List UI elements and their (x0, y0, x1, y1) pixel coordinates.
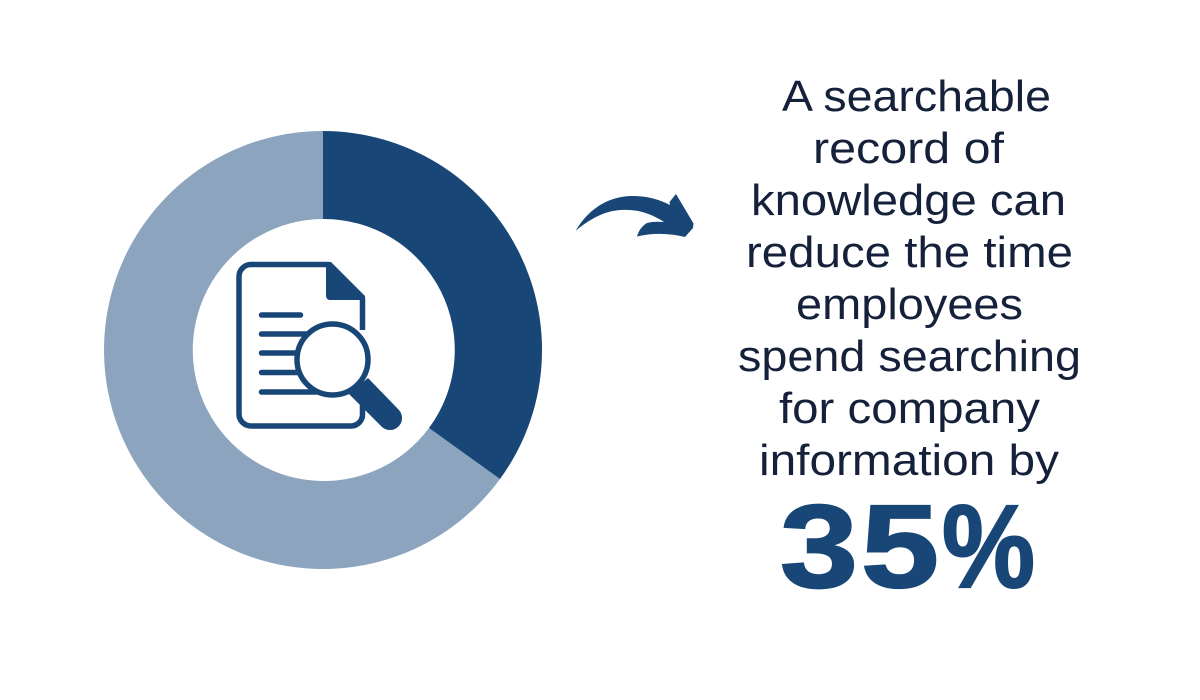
donut segment: remaining 65% (104, 131, 500, 569)
text block: description: employees (796, 280, 1023, 329)
text block: description: for company (779, 384, 1040, 433)
statistic: 35%: % (942, 481, 1035, 613)
statistic: 35%: 3 (780, 481, 858, 613)
text block: description: record of (813, 124, 1005, 173)
text block: description: reduce the time (746, 228, 1073, 277)
donut chart: 35% (104, 131, 542, 569)
document folded corner (326, 262, 365, 300)
text block: description (738, 72, 1081, 485)
statistic: 35%: 5 (861, 481, 939, 613)
document text lines (262, 315, 316, 392)
arrow pointing to text (576, 194, 694, 237)
magnifying glass lens (297, 324, 368, 395)
donut segment: highlighted 35% (323, 131, 542, 479)
text block: description: spend searching (738, 332, 1081, 381)
document outline (239, 264, 362, 426)
text block: description: knowledge can (751, 176, 1066, 225)
icon: document with magnifying glass (239, 262, 402, 430)
magnifying glass handle (349, 378, 402, 430)
text block: description: A searchable (782, 72, 1051, 121)
text block: description: information by (759, 436, 1059, 485)
